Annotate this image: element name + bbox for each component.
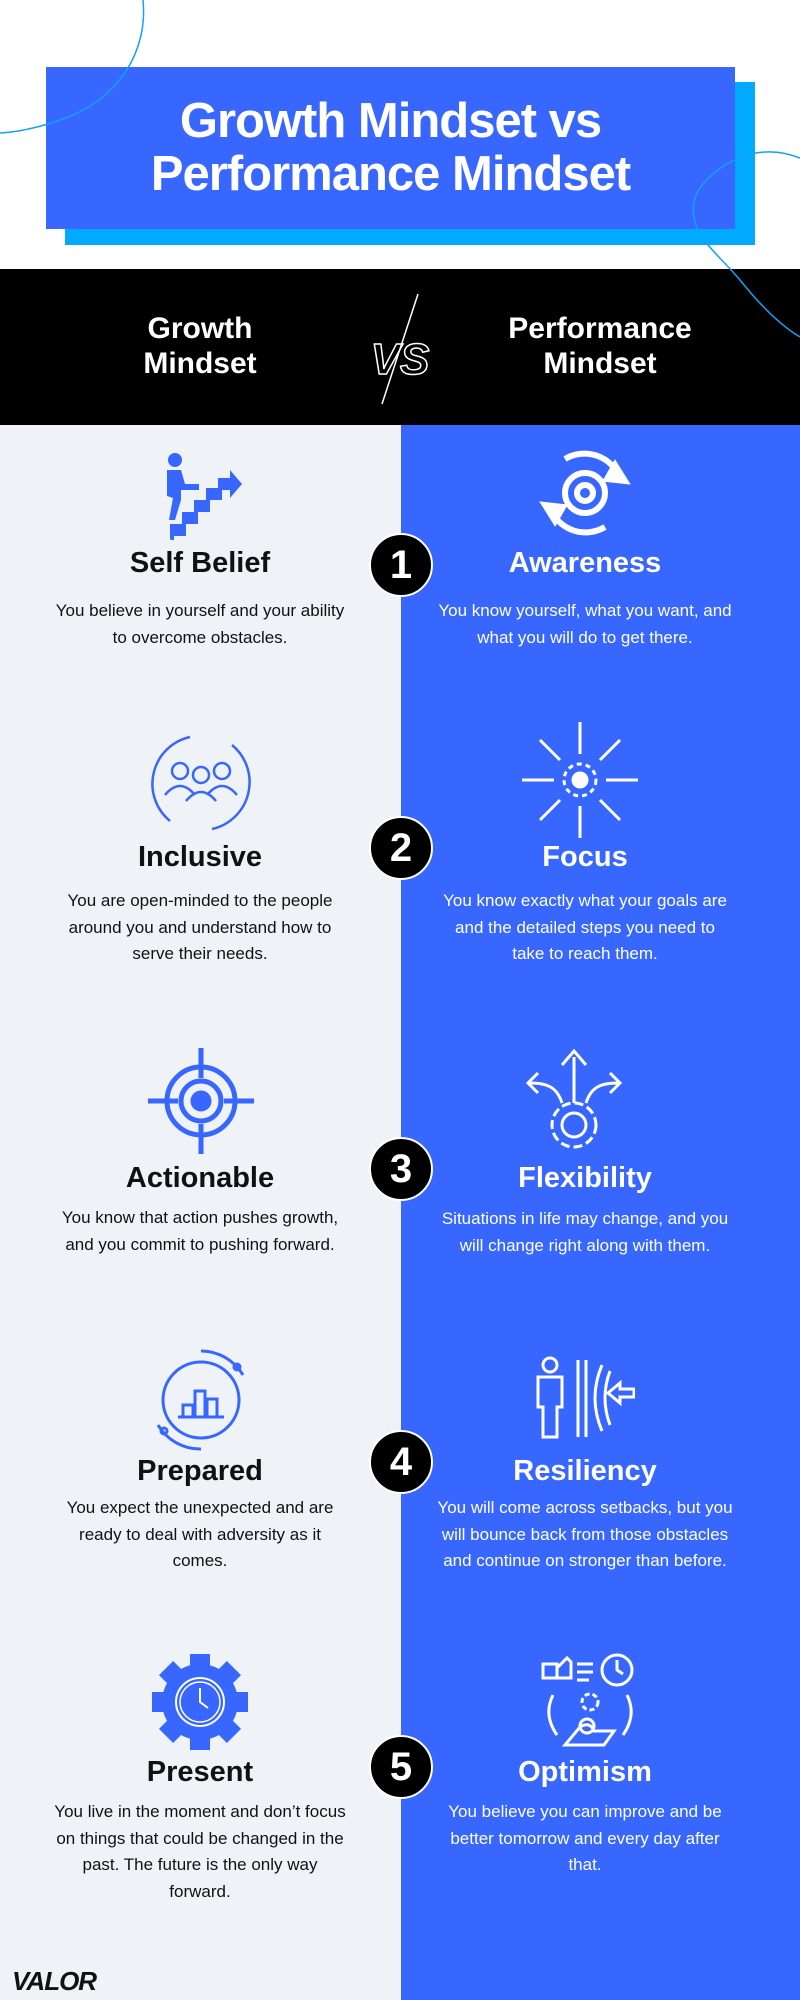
title block	[46, 67, 755, 245]
badge 5: 5	[390, 1745, 412, 1789]
icon: inclusive	[151, 736, 251, 830]
badge 2	[369, 816, 433, 880]
icon: clock gear	[152, 1654, 248, 1750]
icon: awareness	[539, 450, 631, 536]
text: inclusive: You are open-minded to the people around you and understand how to serve their needs.	[68, 891, 332, 963]
icon: flexibility	[526, 1048, 622, 1148]
heading: flexibility: Flexibility	[518, 1162, 652, 1194]
heading: performance	[508, 312, 692, 380]
badge 3: 3	[390, 1147, 412, 1191]
text: actionable: You know that action pushes growth, and you commit to pushing forward.	[62, 1208, 338, 1254]
heading: resiliency: Resiliency	[513, 1455, 657, 1487]
badge 4	[369, 1430, 433, 1494]
heading: growth: Growth	[148, 312, 252, 345]
header band	[0, 269, 800, 425]
icon: resiliency	[536, 1356, 635, 1438]
logo: valor: VALOR	[12, 1966, 96, 1996]
decorative curves	[0, 0, 800, 338]
heading: actionable: Actionable	[126, 1162, 274, 1194]
icon: prepared	[156, 1350, 244, 1450]
heading: self belief: Self Belief	[130, 547, 270, 579]
text: prepared: You expect the unexpected and are ready to deal with adversity as it comes.	[67, 1498, 333, 1570]
icon: stairs	[167, 453, 242, 540]
heading: performance: Performance	[508, 312, 692, 345]
text: awareness: You know yourself, what you want, and what you will do to get there.	[438, 601, 732, 646]
icon: focus	[522, 722, 638, 838]
text: optimism: You believe you can improve and be better tomorrow and every day after that.	[448, 1802, 722, 1874]
text: self belief: You believe in yourself and your ability to overcome obstacles.	[56, 601, 344, 646]
heading: growth	[143, 312, 257, 380]
heading: present: Present	[147, 1756, 253, 1788]
badge 4: 4	[390, 1440, 412, 1484]
title text: Performance Mindset	[151, 147, 630, 201]
badge 5	[369, 1735, 433, 1799]
heading: inclusive: Inclusive	[138, 841, 262, 873]
badge 3	[369, 1137, 433, 1201]
badge 1	[369, 533, 433, 597]
heading: performance: Mindset	[543, 347, 657, 380]
title text: Growth Mindset vs	[180, 94, 601, 148]
icon: vs: VS	[371, 335, 429, 384]
heading: focus: Focus	[542, 841, 628, 873]
heading: awareness: Awareness	[509, 547, 661, 579]
icon: vs	[371, 294, 430, 404]
heading: prepared: Prepared	[137, 1455, 263, 1487]
text: present: You live in the moment and don’t focus on things that could be changed in the past. The future is the only way forward.	[54, 1802, 346, 1900]
text: focus: You know exactly what your goals are and the detailed steps you need to take to reach them.	[443, 891, 727, 963]
icon: optimism	[542, 1654, 634, 1746]
heading: optimism: Optimism	[518, 1756, 652, 1788]
text: flexibility: Situations in life may change, and you will change right along with them.	[442, 1209, 728, 1254]
text: resiliency: You will come across setbacks, but you will bounce back from those obstacles and continue on stronger than before.	[437, 1498, 733, 1570]
panel: growth column	[0, 425, 401, 2000]
badge 1: 1	[390, 543, 412, 587]
heading: growth: Mindset	[143, 347, 257, 380]
badge 2: 2	[390, 826, 412, 870]
panel: performance column	[401, 425, 800, 2000]
title text	[151, 94, 631, 201]
icon: target	[148, 1048, 254, 1154]
